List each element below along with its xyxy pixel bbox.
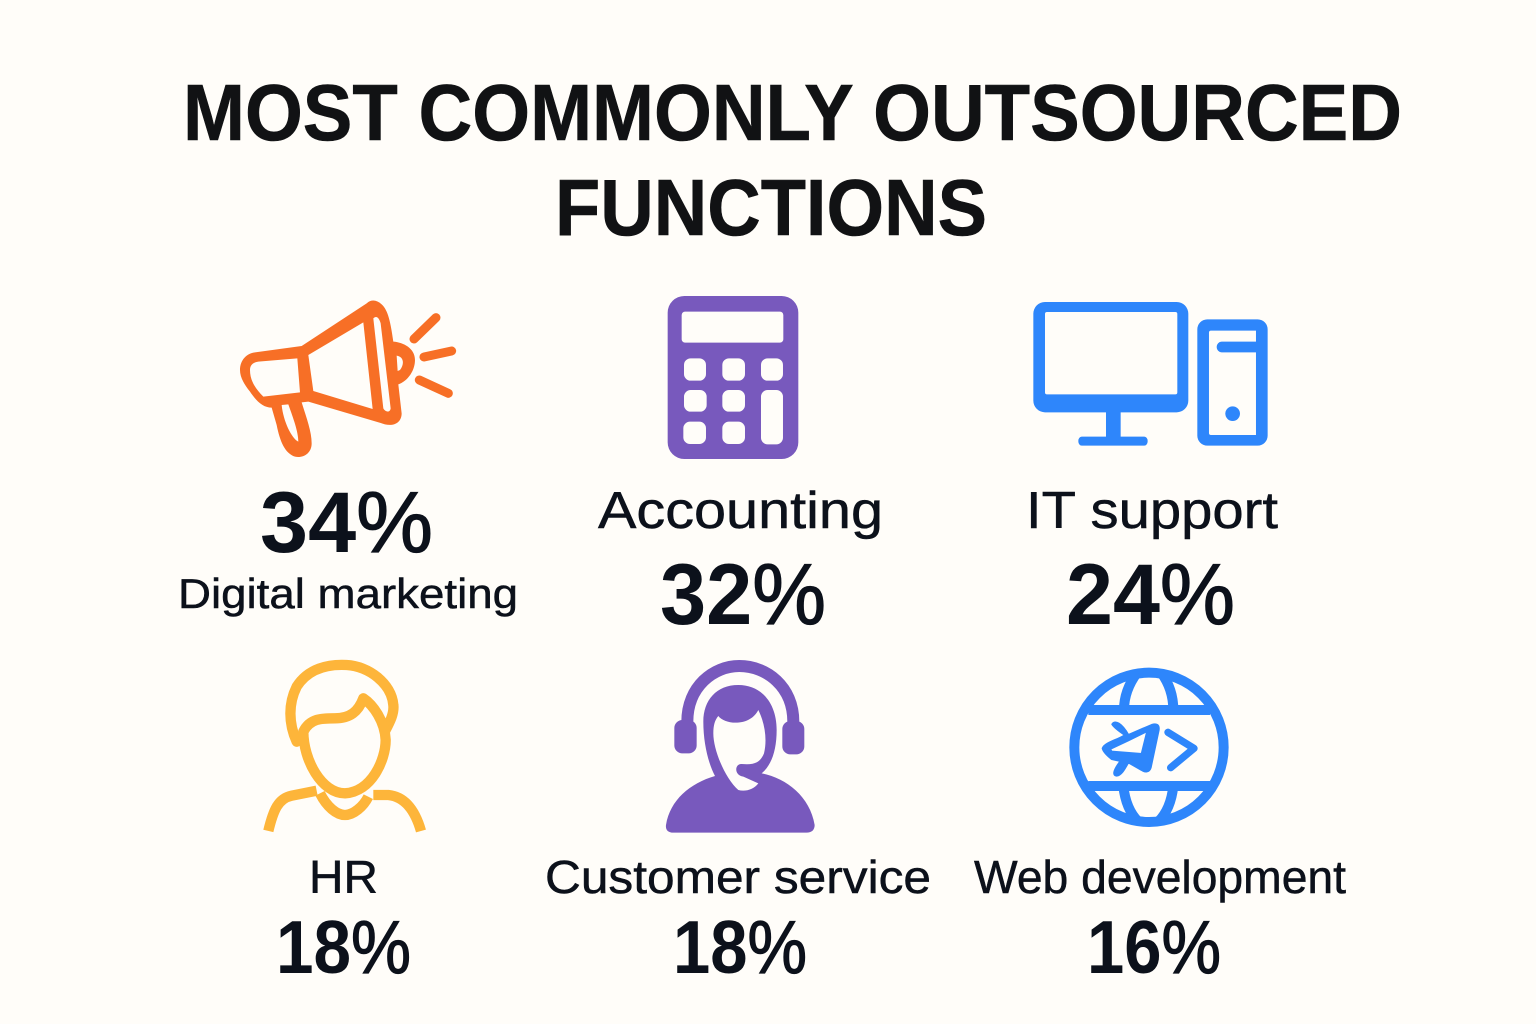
panel: HR [268,665,421,989]
stat: 16%: 16% [1087,905,1221,989]
panel: IT support [1026,302,1279,643]
label: digital marketing: Digital marketing [178,570,518,617]
panel: web development [974,672,1346,989]
title: FUNCTIONS [555,163,987,252]
icon: desktop computer [1033,302,1268,446]
stat: 18%: 18% [276,905,411,989]
stat: 24%: 24% [1066,547,1235,643]
title: MOST COMMONLY OUTSOURCED [183,68,1402,157]
stat: 34%: 34% [260,475,433,571]
label: accounting: Accounting [598,482,883,540]
icon: headset agent [666,666,815,833]
panel: accounting [598,296,883,643]
icon: globe with code [1074,672,1224,822]
panel: customer service [545,666,931,989]
stat: 32%: 32% [660,547,826,643]
label: IT support: IT support [1026,482,1279,540]
stat: 18%: 18% [673,905,807,989]
icon: calculator [668,296,798,459]
label: web development: Web development [974,851,1346,903]
icon: person outline [268,665,421,831]
label: HR: HR [309,851,378,903]
title [183,68,1402,252]
panel: digital marketing [178,301,518,617]
label: customer service: Customer service [545,851,931,903]
icon: megaphone [240,301,452,457]
